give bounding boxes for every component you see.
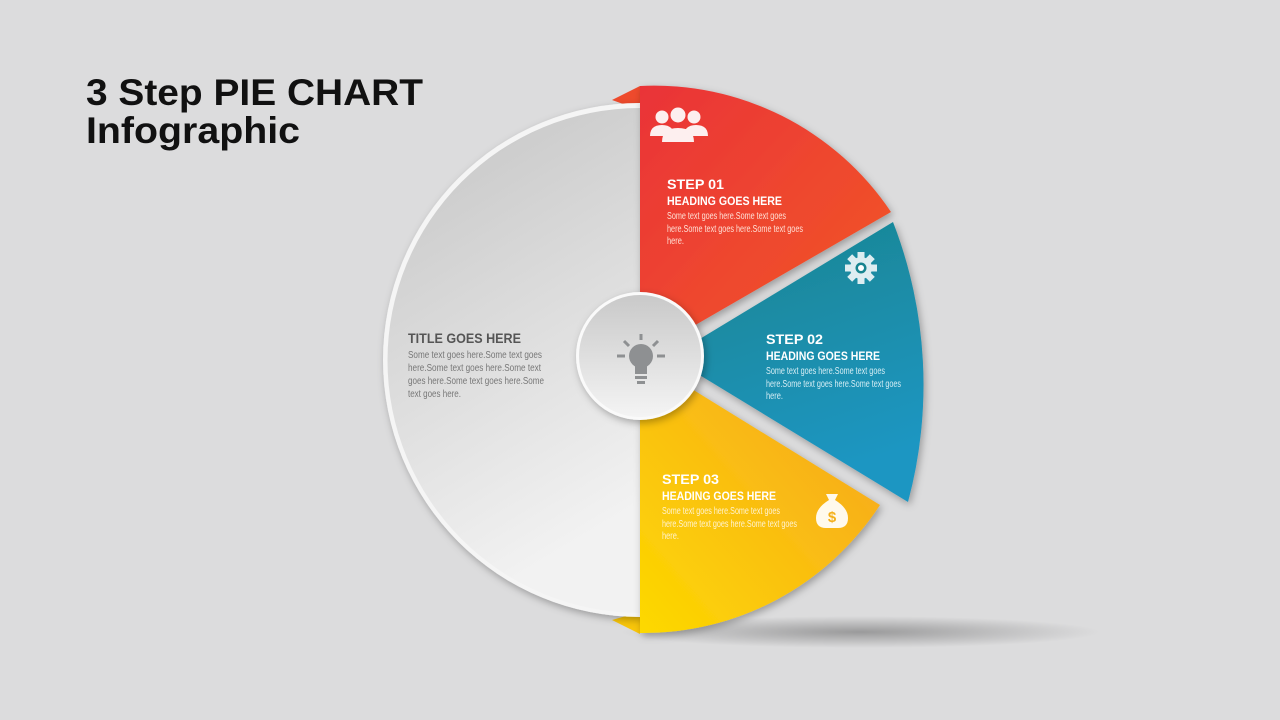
text: step 02 (766, 331, 901, 402)
panel: gray half (383, 103, 640, 617)
text: step 02: Some text goes here.Some text goes (766, 366, 885, 377)
text: step 02: STEP 02 (766, 331, 823, 347)
text: step 03: HEADING GOES HERE (662, 489, 776, 503)
floor shadow (620, 616, 1100, 648)
text: step 01: Some text goes here.Some text goes (667, 211, 786, 222)
icon: money bag (816, 494, 848, 528)
text: step 02: here.Some text goes here.Some text goes (766, 379, 901, 390)
center circle (576, 292, 704, 420)
text: title block (408, 330, 544, 400)
text: title block: text goes here. (408, 388, 461, 400)
text: step 03: here. (662, 531, 679, 542)
text: title block: here.Some text goes here.Some text (408, 362, 541, 374)
slice: step 01 red (640, 86, 891, 357)
slice: step 02 teal (670, 222, 924, 502)
text: title block: TITLE GOES HERE (408, 330, 521, 346)
text: step 03: STEP 03 (662, 471, 719, 487)
icon: money bag: $ (828, 509, 837, 526)
icon: people (650, 108, 708, 142)
text: step 03: here.Some text goes here.Some text goes (662, 519, 797, 530)
text: step 01: here.Some text goes here.Some text goes (667, 224, 803, 235)
title (86, 72, 423, 151)
title: Infographic (86, 110, 300, 151)
text: title block: Some text goes here.Some text goes (408, 349, 542, 361)
text: step 01: here. (667, 236, 684, 247)
text: step 03: Some text goes here.Some text goes (662, 506, 780, 517)
back slivers (612, 86, 640, 110)
slice: step 03 orange (640, 357, 880, 633)
text: step 02: HEADING GOES HERE (766, 349, 880, 363)
text: title block: goes here.Some text goes here.Some (408, 375, 544, 387)
text: step 03 (662, 471, 797, 542)
icon: light bulb (617, 334, 665, 384)
text: step 01: HEADING GOES HERE (667, 194, 782, 208)
text: step 01: STEP 01 (667, 176, 724, 192)
text: step 02: here. (766, 391, 783, 402)
icon: gear (845, 252, 877, 284)
title: 3 Step PIE CHART (86, 72, 423, 113)
text: step 01 (667, 176, 803, 247)
